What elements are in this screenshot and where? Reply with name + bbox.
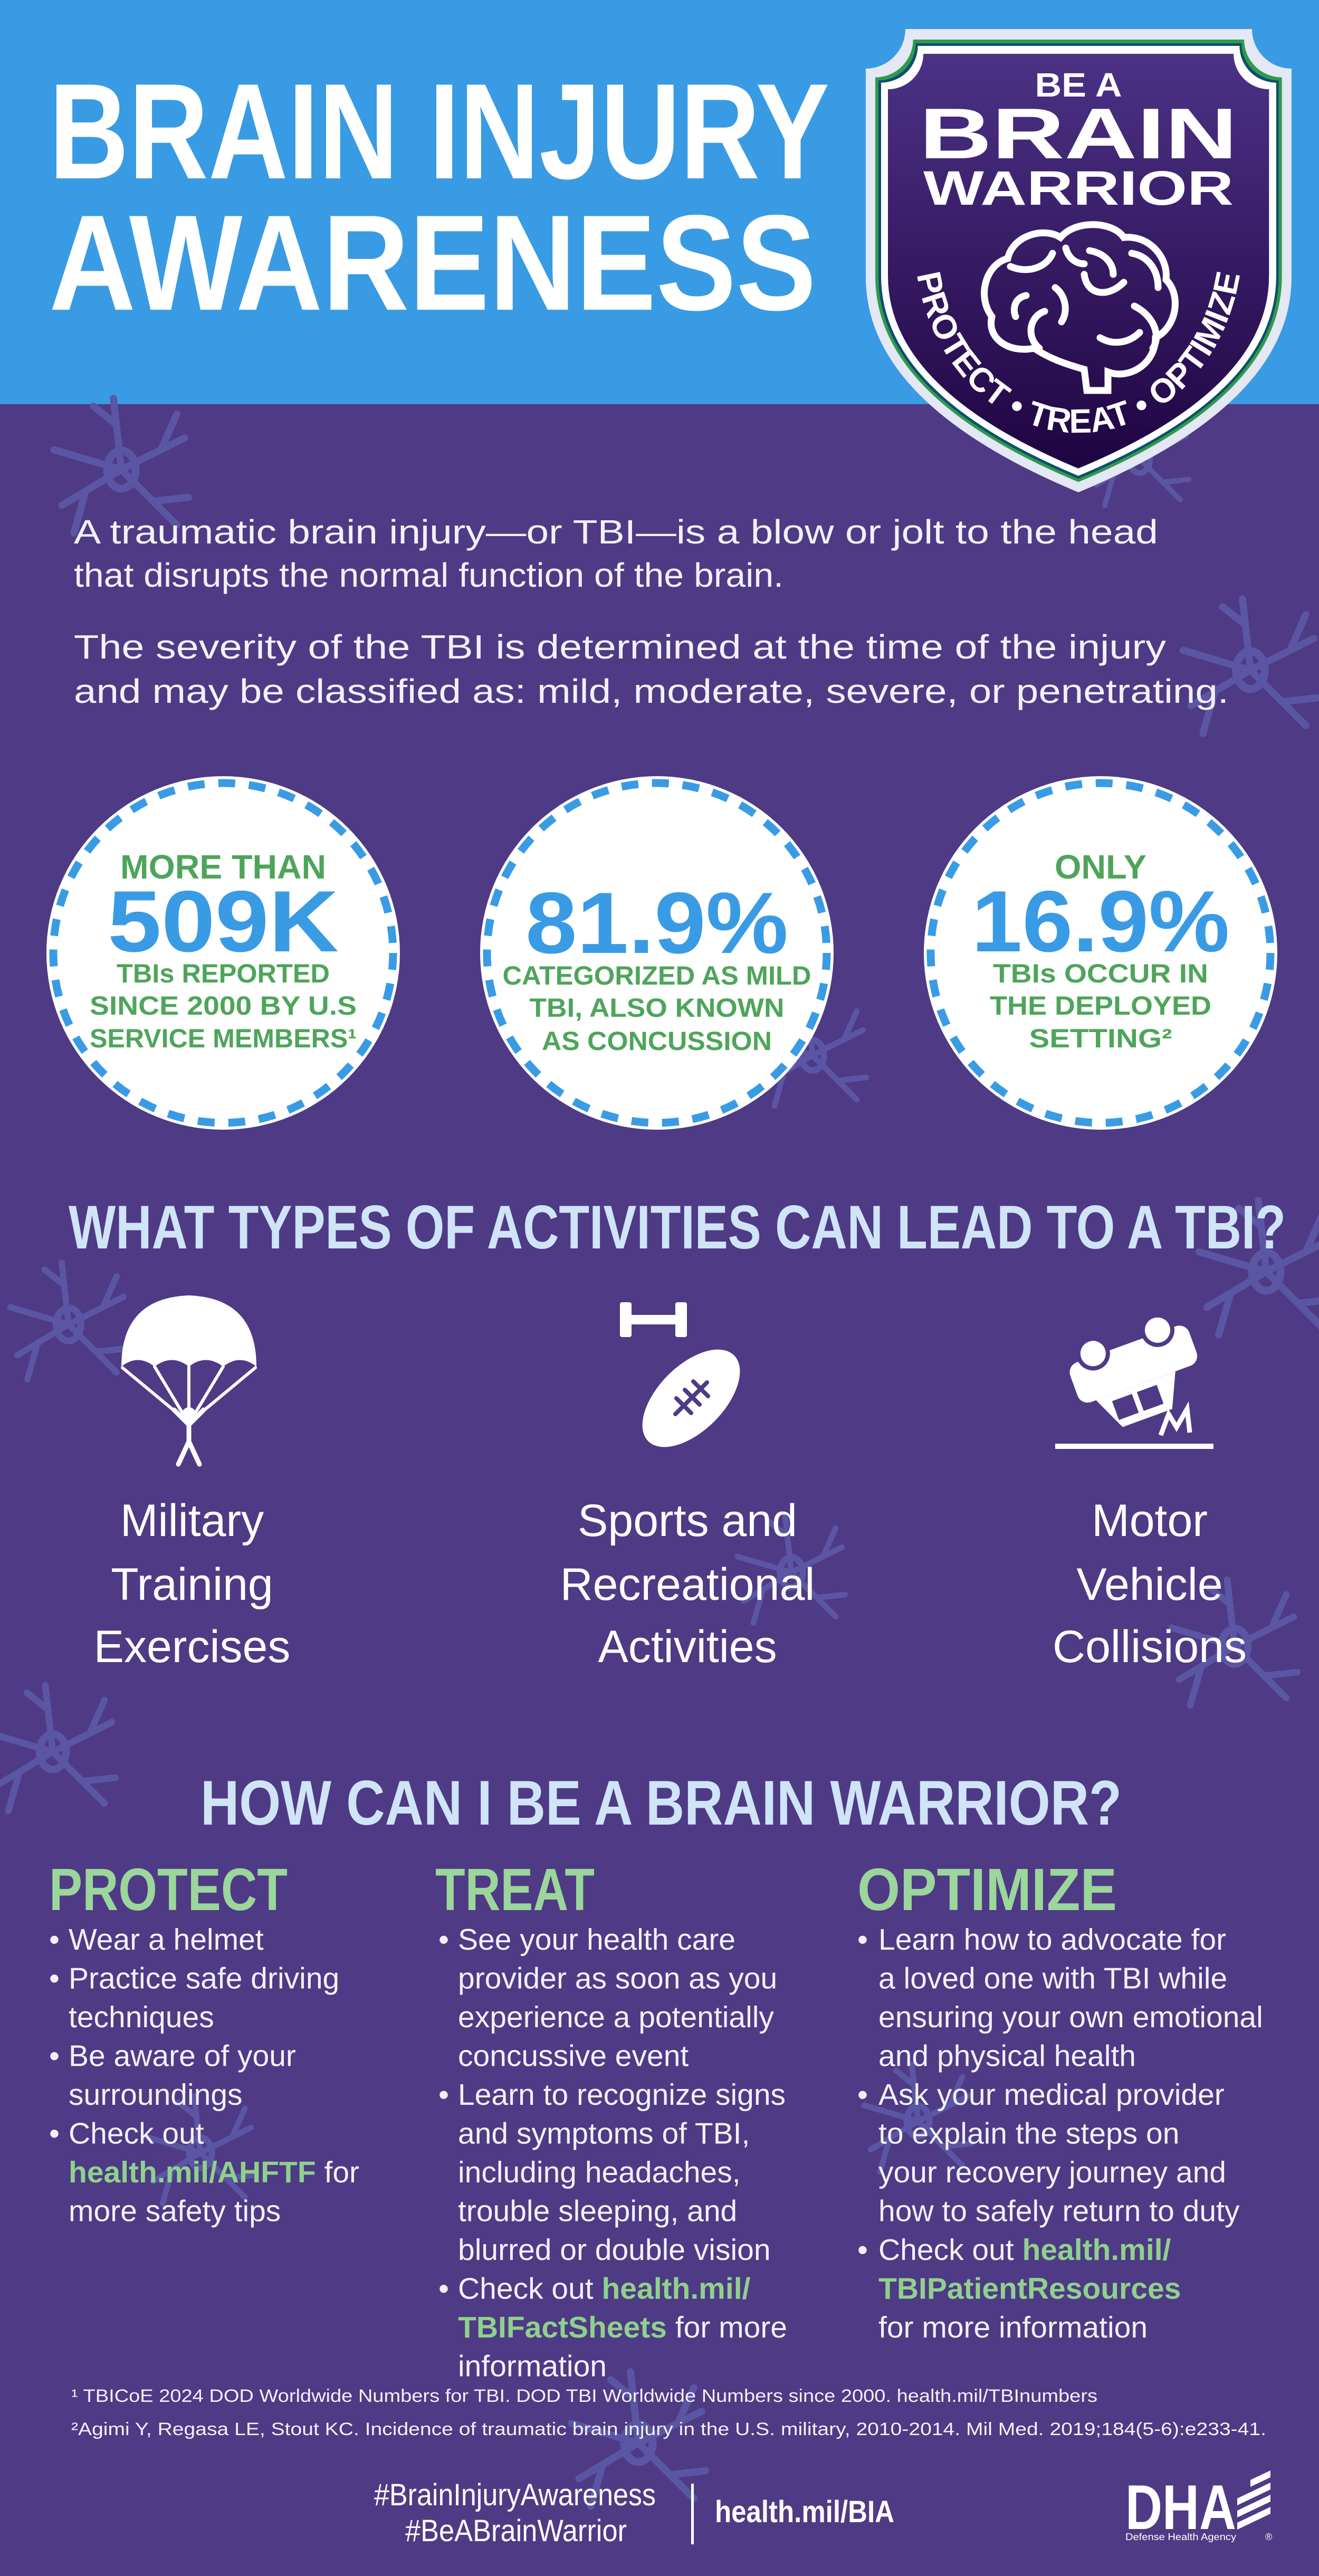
icon: brain [985, 225, 1175, 390]
icon: overturned car [1055, 1306, 1213, 1449]
activity labels: Motor [1092, 1495, 1208, 1546]
panel: treat: blurred or double vision [458, 2233, 771, 2267]
panel: protect [49, 1856, 359, 2228]
activity labels: Vehicle [1076, 1559, 1223, 1610]
stat circle: 509K: SERVICE MEMBERS¹ [90, 1024, 357, 1053]
intro text: that disrupts the normal function of the brain. [74, 556, 783, 594]
stat circle: 16.9%: ONLY [1055, 848, 1146, 886]
panel: optimize: OPTIMIZE [857, 1856, 1117, 1923]
heading: brain warrior: HOW CAN I BE A BRAIN WARRIOR? [200, 1768, 1122, 1838]
stat circle: 16.9%: THE DEPLOYED [990, 991, 1211, 1020]
panel: protect: health.mil/AHFTF for [69, 2155, 359, 2189]
intro text: and may be classified as: mild, moderate, severe, or penetrating. [74, 672, 1229, 710]
panel: optimize: • [857, 2233, 868, 2267]
activity labels: Recreational [560, 1559, 815, 1610]
stat circle: 81.9%: TBI, ALSO KNOWN [530, 993, 784, 1023]
activity labels: Military [120, 1495, 264, 1546]
panel: protect: techniques [69, 2000, 214, 2034]
badge: be a brain warrior shield: BRAIN [919, 93, 1238, 174]
panel: treat: including headaches, [458, 2155, 741, 2189]
activity labels: Sports and [578, 1495, 797, 1546]
panel: treat: information [458, 2349, 607, 2383]
badge: be a brain warrior shield: PROTECT • TREAT • OPTIMIZE [917, 271, 1240, 433]
footer hashtags: #BrainInjuryAwareness [374, 2478, 656, 2512]
title: BRAIN INJURY [49, 55, 829, 207]
stat circle: 81.9% [480, 776, 834, 1130]
panel: protect: Wear a helmet [69, 1923, 264, 1957]
footnotes [71, 2386, 1266, 2439]
activity labels [94, 1495, 1247, 1672]
panel: treat: Learn to recognize signs [458, 2078, 786, 2112]
panel: protect: Check out [69, 2117, 204, 2151]
stat circle: 16.9%: SETTING² [1029, 1024, 1172, 1053]
activity labels: Exercises [94, 1621, 290, 1672]
panel: protect: • [49, 1923, 60, 1957]
icon: parachute [121, 1295, 256, 1464]
panel: treat: experience a potentially [458, 2000, 774, 2034]
panel: treat: concussive event [458, 2039, 689, 2073]
panel: protect: more safety tips [69, 2194, 281, 2228]
footer hashtags: #BeABrainWarrior [405, 2514, 627, 2548]
panel: treat: Check out health.mil/ [458, 2272, 751, 2306]
panel: treat: See your health care [458, 1923, 735, 1957]
panel: treat: • [438, 2272, 449, 2306]
footnotes: ¹ TBICoE 2024 DOD Worldwide Numbers for TBI. DOD TBI Worldwide Numbers since 2000. health.mil/TBInumbers [71, 2386, 1097, 2406]
panel: optimize: Ask your medical provider [878, 2078, 1225, 2112]
footer url: health.mil/BIA [715, 2495, 894, 2529]
panel: treat: TREAT [435, 1856, 595, 1923]
panel: optimize: • [857, 2078, 868, 2112]
stat circle: 16.9%: 16.9% [972, 873, 1229, 970]
stat circle: 81.9%: AS CONCUSSION [542, 1026, 772, 1056]
title: AWARENESS [49, 186, 816, 339]
panel: optimize: • [857, 1923, 868, 1957]
panel: optimize: a loved one with TBI while [878, 1962, 1227, 1996]
stat circle: 509K: SINCE 2000 BY U.S [90, 991, 357, 1020]
logo: DHA: DHA [1125, 2472, 1236, 2543]
panel: optimize: Learn how to advocate for [878, 1923, 1226, 1957]
panel: protect: • [49, 2039, 60, 2073]
stat circle: 81.9%: CATEGORIZED AS MILD [502, 961, 811, 990]
intro text: A traumatic brain injury—or TBI—is a blow or jolt to the head [74, 513, 1158, 551]
panel: optimize: to explain the steps on [878, 2117, 1179, 2151]
stat circle: 509K: TBIs REPORTED [117, 959, 330, 988]
stat circle: 509K: MORE THAN [120, 848, 326, 886]
activity labels: Collisions [1053, 1621, 1247, 1672]
intro text [74, 513, 1229, 710]
activity labels: Training [111, 1559, 273, 1610]
badge: be a brain warrior shield: WARRIOR [923, 161, 1234, 215]
panel: treat [435, 1856, 787, 2383]
panel: treat: • [438, 1923, 449, 1957]
footnotes: ²Agimi Y, Regasa LE, Stout KC. Incidence of traumatic brain injury in the U.S. military, 2010-2014. Mil Med. 2019;184(5-6):e233-41. [71, 2419, 1266, 2439]
badge: be a brain warrior shield: BE A [1035, 66, 1122, 104]
activity labels: Activities [598, 1621, 777, 1672]
panel: optimize: your recovery journey and [878, 2155, 1226, 2189]
panel: treat: and symptoms of TBI, [458, 2117, 750, 2151]
icon: football and dumbbell [620, 1302, 757, 1464]
panel: optimize: and physical health [878, 2039, 1136, 2073]
panel: protect: Be aware of your [69, 2039, 296, 2073]
title [49, 55, 829, 339]
panel: optimize: for more information [878, 2311, 1148, 2344]
panel: protect: • [49, 2117, 60, 2151]
panel: protect: PROTECT [49, 1856, 288, 1923]
panel: protect: • [49, 1962, 60, 1996]
stat circle: 509K: 509K [108, 873, 339, 970]
panel: treat: TBIFactSheets for more [458, 2311, 787, 2344]
panel: optimize: ensuring your own emotional [878, 2000, 1263, 2034]
stat circle: 16.9% [924, 776, 1277, 1130]
panel: treat: • [438, 2078, 449, 2112]
panel: protect: Practice safe driving [69, 1962, 339, 1996]
stat circle: 81.9%: 81.9% [525, 874, 788, 971]
logo: DHA: Defense Health Agency [1125, 2532, 1236, 2542]
panel: optimize: TBIPatientResources [878, 2272, 1181, 2306]
intro text: The severity of the TBI is determined at the time of the injury [74, 628, 1166, 666]
panel: optimize: Check out health.mil/ [878, 2233, 1171, 2267]
panel: optimize: how to safely return to duty [878, 2194, 1240, 2228]
footer hashtags [374, 2478, 656, 2548]
panel: optimize [857, 1856, 1263, 2344]
stat circle: 509K [46, 776, 400, 1130]
panel: treat: trouble sleeping, and [458, 2194, 737, 2228]
panel: treat: provider as soon as you [458, 1962, 777, 1996]
logo: DHA: ® [1265, 2532, 1272, 2542]
stat circle: 16.9%: TBIs OCCUR IN [993, 959, 1208, 988]
badge: be a brain warrior shield [866, 29, 1292, 492]
panel: protect: surroundings [69, 2078, 243, 2112]
